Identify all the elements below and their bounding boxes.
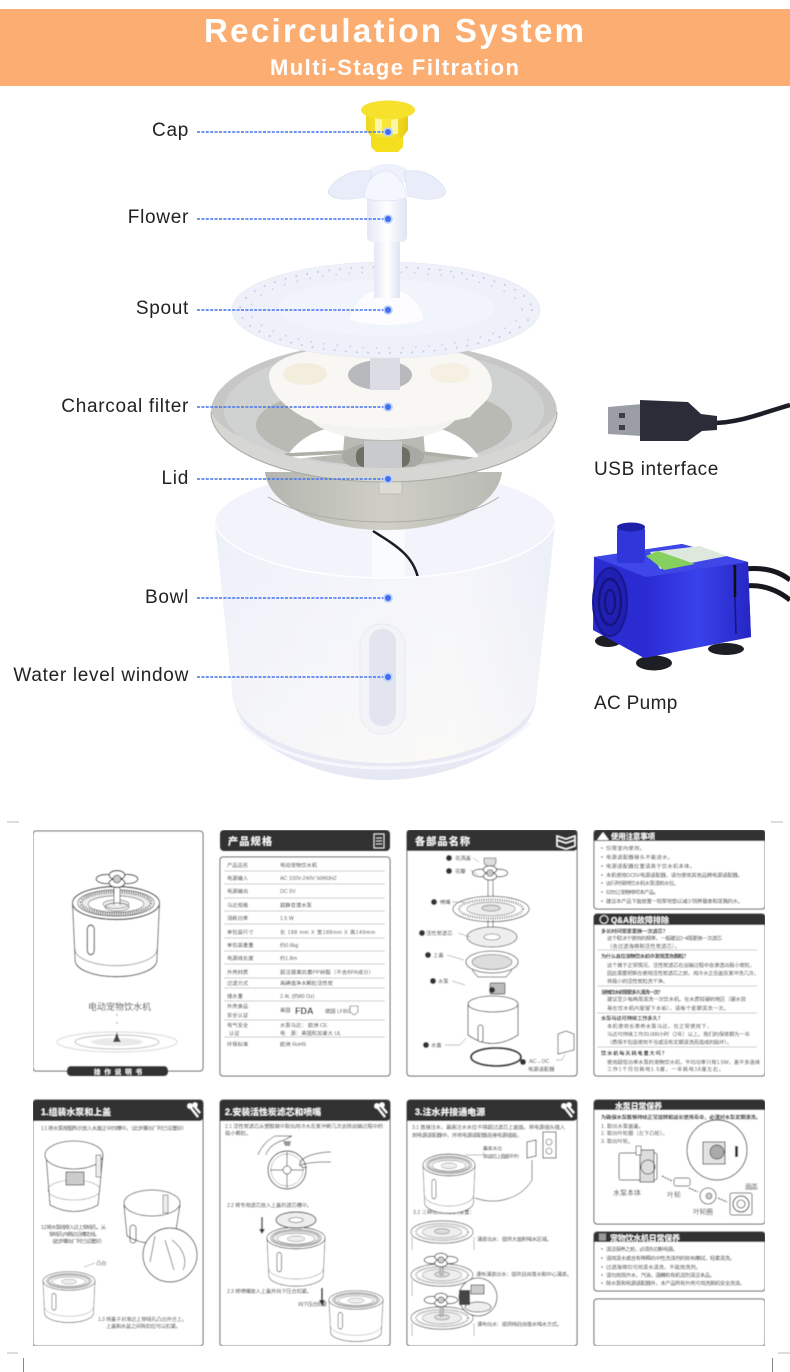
spec table: 外壳材质 xyxy=(227,968,249,976)
spec table: 约1.8m xyxy=(280,954,298,962)
spec table: 2.4L (约80 Oz) xyxy=(280,992,315,1000)
step 3 text: 漫布出水：提供纯自由落水喝水方式。 xyxy=(477,1320,562,1328)
q and a text: （含过滤海棉和活性炭滤芯）。 xyxy=(607,942,680,950)
q and a text: 工作1个月仅耗电1.5度，一年耗电18度左右。 xyxy=(607,1065,724,1073)
spec table: 环保标准 xyxy=(227,1040,249,1048)
step 1 text: 上盖和水盆之间有扣位可以扣紧。 xyxy=(106,1322,181,1330)
part labels: Cap xyxy=(152,120,189,141)
step 2 text xyxy=(225,1122,383,1308)
spec table: 电源输出 xyxy=(227,887,248,895)
spec table: 过滤方式 xyxy=(227,979,249,987)
part: flower xyxy=(328,164,446,242)
notes list: 电源适配器位置请高于饮水机本体。 xyxy=(606,862,695,870)
cover title: 电动宠物饮水机 xyxy=(88,1001,151,1012)
spec table: 1.5 W xyxy=(280,916,294,922)
spec table: FDA xyxy=(295,1006,314,1016)
spec header xyxy=(220,830,390,851)
step 3 text: 3.2 三种出水方式的设置： xyxy=(413,1208,475,1216)
notes header: 使用注意事项 xyxy=(611,831,656,841)
parts labels: 活性炭滤芯 xyxy=(426,929,453,937)
subtitle: Multi-Stage Filtration xyxy=(270,55,519,80)
q and a text: 多长时间需要更换一次滤芯？ xyxy=(601,927,668,935)
parts labels xyxy=(419,854,565,1073)
spec table: 约0.6kg xyxy=(280,941,298,949)
panel: pump maintenance xyxy=(594,1100,765,1224)
manual sheet xyxy=(33,830,765,1346)
panel: step 3 xyxy=(407,1100,577,1346)
spec table: DC 5V xyxy=(280,889,296,895)
pump drawing labels xyxy=(613,1182,758,1216)
step 1 text: 穿线孔内侧边沿槽走线。 xyxy=(49,1230,100,1238)
q and a text: 本机使用长寿命水泵马达，在正常使用下， xyxy=(607,1022,712,1030)
daily care list: 请用清水或含有稀释的中性洗涤剂的软布擦拭，轻柔清洗。 xyxy=(606,1254,735,1262)
spec table: 电 源：美国和加拿大 UL xyxy=(280,1029,341,1037)
pump maintenance text: 3. 取出叶轮。 xyxy=(601,1137,633,1145)
parts labels: 喷嘴 xyxy=(440,898,451,906)
parts labels: 水盘 xyxy=(431,1041,442,1049)
step 2 text: 2.3 将喷嘴放入上盖并向下压合扣紧。 xyxy=(227,1287,312,1295)
spec table xyxy=(224,861,385,1048)
panel: manual cover xyxy=(33,831,203,1076)
panel: q and a xyxy=(594,914,765,1076)
notes list: 本机使用DC5V电源适配器，请勿使用其他品牌电源适配器。 xyxy=(606,871,743,879)
pump drawing labels: 面盖 xyxy=(745,1182,758,1191)
part: cap xyxy=(361,100,415,152)
notes list: 切勿让宠物啃咬本产品。 xyxy=(606,888,659,896)
q and a text: 易在饮水机内留留下水垢），请每个星期清洗一次。 xyxy=(607,1004,729,1012)
spec table: 单包装尺寸 xyxy=(227,928,254,936)
panel: daily care xyxy=(594,1232,765,1291)
parts header xyxy=(407,830,577,851)
manual pill: 操作说明书 xyxy=(94,1067,142,1076)
q and a header: Q&A和故障排除 xyxy=(611,915,669,925)
step 2 header xyxy=(220,1100,390,1121)
part labels: Charcoal filter xyxy=(61,396,189,417)
part: charcoal filter xyxy=(269,346,492,440)
step 1 drawings xyxy=(43,1141,197,1323)
q and a text: 宠物饮水机需要多久清洗一次？ xyxy=(601,988,663,996)
daily care header xyxy=(594,1232,765,1243)
part labels xyxy=(13,120,189,686)
q and a text: 饮水机每天耗电量大吗？ xyxy=(601,1049,667,1057)
daily care list xyxy=(601,1245,745,1287)
panel: step 2 xyxy=(220,1100,390,1346)
spec table: 马达规格 xyxy=(227,901,249,909)
pump drawing labels: 叶轮 xyxy=(667,1190,681,1199)
cover fountain drawing xyxy=(72,871,160,977)
step 3 text xyxy=(412,1123,572,1328)
step 3 text: （和滤芯上面面平齐） xyxy=(480,1153,522,1160)
pump maintenance text xyxy=(601,1113,761,1145)
water level window xyxy=(360,624,405,734)
step 1 drawings: 凸台 xyxy=(96,1259,107,1267)
step 3 text: 3.1 直接注水，最高注水水位不得超过滤芯上面面。将电源插头插入 xyxy=(412,1123,566,1131)
step 3 text: 漫布涌泉出水：提供自由落水和中心涌泉。 xyxy=(476,1270,572,1278)
q and a text xyxy=(597,927,761,1073)
pump drawing labels: 叶轮圈 xyxy=(693,1207,713,1216)
step 2 text: 极小颗粒。 xyxy=(225,1129,252,1137)
pump maintenance header xyxy=(594,1100,765,1111)
panel: empty box xyxy=(594,1299,765,1346)
step 1 header: 1.组装水泵和上盖 xyxy=(41,1106,111,1117)
pump label: AC Pump xyxy=(594,693,678,714)
panel: parts names xyxy=(407,830,577,1076)
exploded parts drawing xyxy=(453,858,574,1066)
water drop ripple xyxy=(57,1014,177,1052)
callout lines xyxy=(197,127,393,682)
q and a text: 这个取决于使用的频率，一般建议2~4周更换一次滤芯 xyxy=(607,934,723,942)
panel: product specification xyxy=(220,830,390,1076)
spec table: 超洁银离抗菌PP树脂（不含BPA成分） xyxy=(280,968,374,976)
daily care list: 清洁保养之前，必须先切断电源。 xyxy=(606,1245,678,1253)
part labels: Bowl xyxy=(145,587,189,608)
step 2 text: 2.1 活性炭滤芯从塑胶袋中取出用冷水反复冲刷几次去除运输过程中的 xyxy=(225,1122,383,1130)
part: bowl xyxy=(215,470,555,780)
spec table: 欧洲 RoHS xyxy=(280,1040,307,1048)
parts labels: 花瓣 xyxy=(455,867,466,875)
q and a text: 这个属于正常情况，活性炭滤芯在运输过程中会渗透出极小炭粒， xyxy=(607,961,755,969)
notes list xyxy=(601,844,743,905)
q and a text: 使用超低功率水泵的宠物饮水机，平均功率只有1.5W，差不多连续 xyxy=(607,1058,761,1066)
pump maintenance header: 水泵日常保养 xyxy=(615,1101,662,1111)
spec table: 储水量 xyxy=(227,992,244,1000)
step 1 text: 1.2 将水泵线穿入达上穿线孔，从 xyxy=(41,1223,107,1231)
panel: step 1: 1.1 将水泵按图所示放入水盘正中凹槽中。（此步骤出厂时已设置好） xyxy=(41,1124,187,1132)
notes list: 运行时保持饮水机水泵浸到水位。 xyxy=(606,879,679,887)
title banner xyxy=(0,9,790,86)
q and a text: 将极小的活性炭粒洗干净。 xyxy=(607,977,668,985)
step 3 drawings xyxy=(411,1132,556,1336)
q and a text: 建议至少每两周清洗一次饮水机。在水质较硬的地区（硬水容 xyxy=(607,995,747,1003)
manual pill xyxy=(67,1066,168,1076)
q and a text: 因此需要把新在使用活性炭滤芯之前，用冷水正反面反复冲洗几次， xyxy=(607,969,759,977)
spec table: 安全认证 xyxy=(227,1011,249,1019)
notes list: 仅限室内使用。 xyxy=(606,844,645,852)
parts labels: 电源适配器 xyxy=(528,1065,555,1073)
spec table: 认证 xyxy=(229,1029,240,1037)
pump maintenance text: 1. 取出水泵面盖。 xyxy=(601,1122,644,1130)
q and a text: 马达可持续工作20,000小时（2年）以上。我们的保修期为一年 xyxy=(607,1030,751,1038)
spec table: 单包装重量 xyxy=(227,941,254,949)
spec table: 德国 LFBG xyxy=(325,1007,351,1015)
spec table: 水泵马达： 欧洲 CE xyxy=(280,1021,328,1029)
step 2 text: 2.2 将专用滤芯放入上盖的滤芯槽中。 xyxy=(227,1201,312,1209)
daily care list: 除水泵和电源适配器外，本产品所有外壳可用洗碗机安全洗涤。 xyxy=(606,1279,745,1287)
step 1 text: （此步骤出厂时已设置好） xyxy=(49,1237,105,1245)
usb label: USB interface xyxy=(594,459,719,480)
spec header: 产品规格 xyxy=(228,835,272,848)
part labels: Lid xyxy=(162,468,189,489)
parts header: 各部品名称 xyxy=(415,835,470,848)
q and a text: （质保不包括使用不当或没有定期清洗而造成的损坏）。 xyxy=(607,1038,732,1046)
step 2 text: 向下压合扣紧 xyxy=(298,1300,327,1308)
parts labels: 水泵 xyxy=(438,977,449,985)
spec table: 消耗功率 xyxy=(227,914,249,922)
q and a text: 为什么会在宠物饮水机中发现黑色颗粒？ xyxy=(601,952,689,960)
spec table: 电源输入 xyxy=(227,874,249,882)
daily care list: 过滤海绵仅可用清水清洗，不能用洗剂。 xyxy=(606,1263,701,1271)
step 3 text: 最高水位 xyxy=(483,1145,502,1152)
crop marks xyxy=(7,822,790,1372)
step 3 text: 到电源适配器中，并将电源适配器连接电源插座。 xyxy=(412,1131,522,1139)
step 1 text xyxy=(41,1223,187,1330)
icon: ac pump xyxy=(593,522,790,670)
spec table: 电气安全 xyxy=(227,1021,249,1029)
spec table: 美国 xyxy=(280,1006,291,1014)
panel: usage notes xyxy=(594,830,765,909)
pump maintenance text: 2. 取出叶轮圈（左下凸轮）。 xyxy=(601,1129,668,1137)
spec table: 长 188 mm X 宽188mm X 高149mm xyxy=(280,928,376,936)
notes header xyxy=(594,830,765,841)
part: lid xyxy=(211,342,557,530)
step 2 drawings xyxy=(258,1136,383,1342)
pump drawing labels: 水泵本体 xyxy=(613,1188,641,1197)
icon: usb plug xyxy=(608,400,790,441)
step 3 header xyxy=(407,1100,577,1121)
spec table: 电源线长度 xyxy=(227,954,254,962)
part labels: Spout xyxy=(136,298,189,319)
q and a text: 水泵马达可持续工作多久？ xyxy=(601,1014,663,1022)
step 3 text: 涌泉出水：提供大面积喝水区域。 xyxy=(477,1235,552,1243)
step 3 header: 3.注水并接通电源 xyxy=(415,1106,485,1117)
step 1 text: 1.3 将盖子对准达上穿线孔凸台并合上。 xyxy=(98,1315,187,1323)
spec table: 高碘值净水颗粒活性炭 xyxy=(280,979,334,987)
daily care header: 宠物饮水机日常保养 xyxy=(610,1233,680,1243)
spec table: 产品品名 xyxy=(227,861,248,869)
spec table: 电动宠物饮水机 xyxy=(280,861,318,869)
pump exploded drawing xyxy=(619,1120,752,1215)
parts labels: AC→DC xyxy=(529,1059,549,1065)
notes list: 建议本产品下面放置一较厚地垫以减少饲养猫食和泼溅的水。 xyxy=(606,897,743,905)
spec table: 外壳食品 xyxy=(227,1002,248,1010)
parts labels: 花洒盖 xyxy=(455,854,472,862)
part labels: Flower xyxy=(128,207,189,228)
title: Recirculation System xyxy=(204,12,584,49)
spec table: AC 100V-240V 50/60HZ xyxy=(280,876,338,882)
step 2 header: 2.安装活性炭滤芯和喷嘴 xyxy=(225,1106,321,1117)
part labels: Water level window xyxy=(13,665,189,686)
daily care list: 请勿用热开水，汽油，酒精和有机溶剂清洁本品。 xyxy=(606,1271,715,1279)
step 1 header xyxy=(33,1100,203,1121)
part: spout xyxy=(232,240,540,358)
notes list: 电源适配器接头不能进水。 xyxy=(606,853,673,861)
parts labels: 上盖 xyxy=(433,951,444,959)
q and a header xyxy=(594,914,765,925)
pump maintenance text: 为确保水泵能够持续正常运转和延长使用寿命，必须对水泵定期清洗。 xyxy=(601,1113,761,1121)
spec table: 超静音潜水泵 xyxy=(280,901,312,909)
panel: step 1 xyxy=(33,1100,203,1346)
